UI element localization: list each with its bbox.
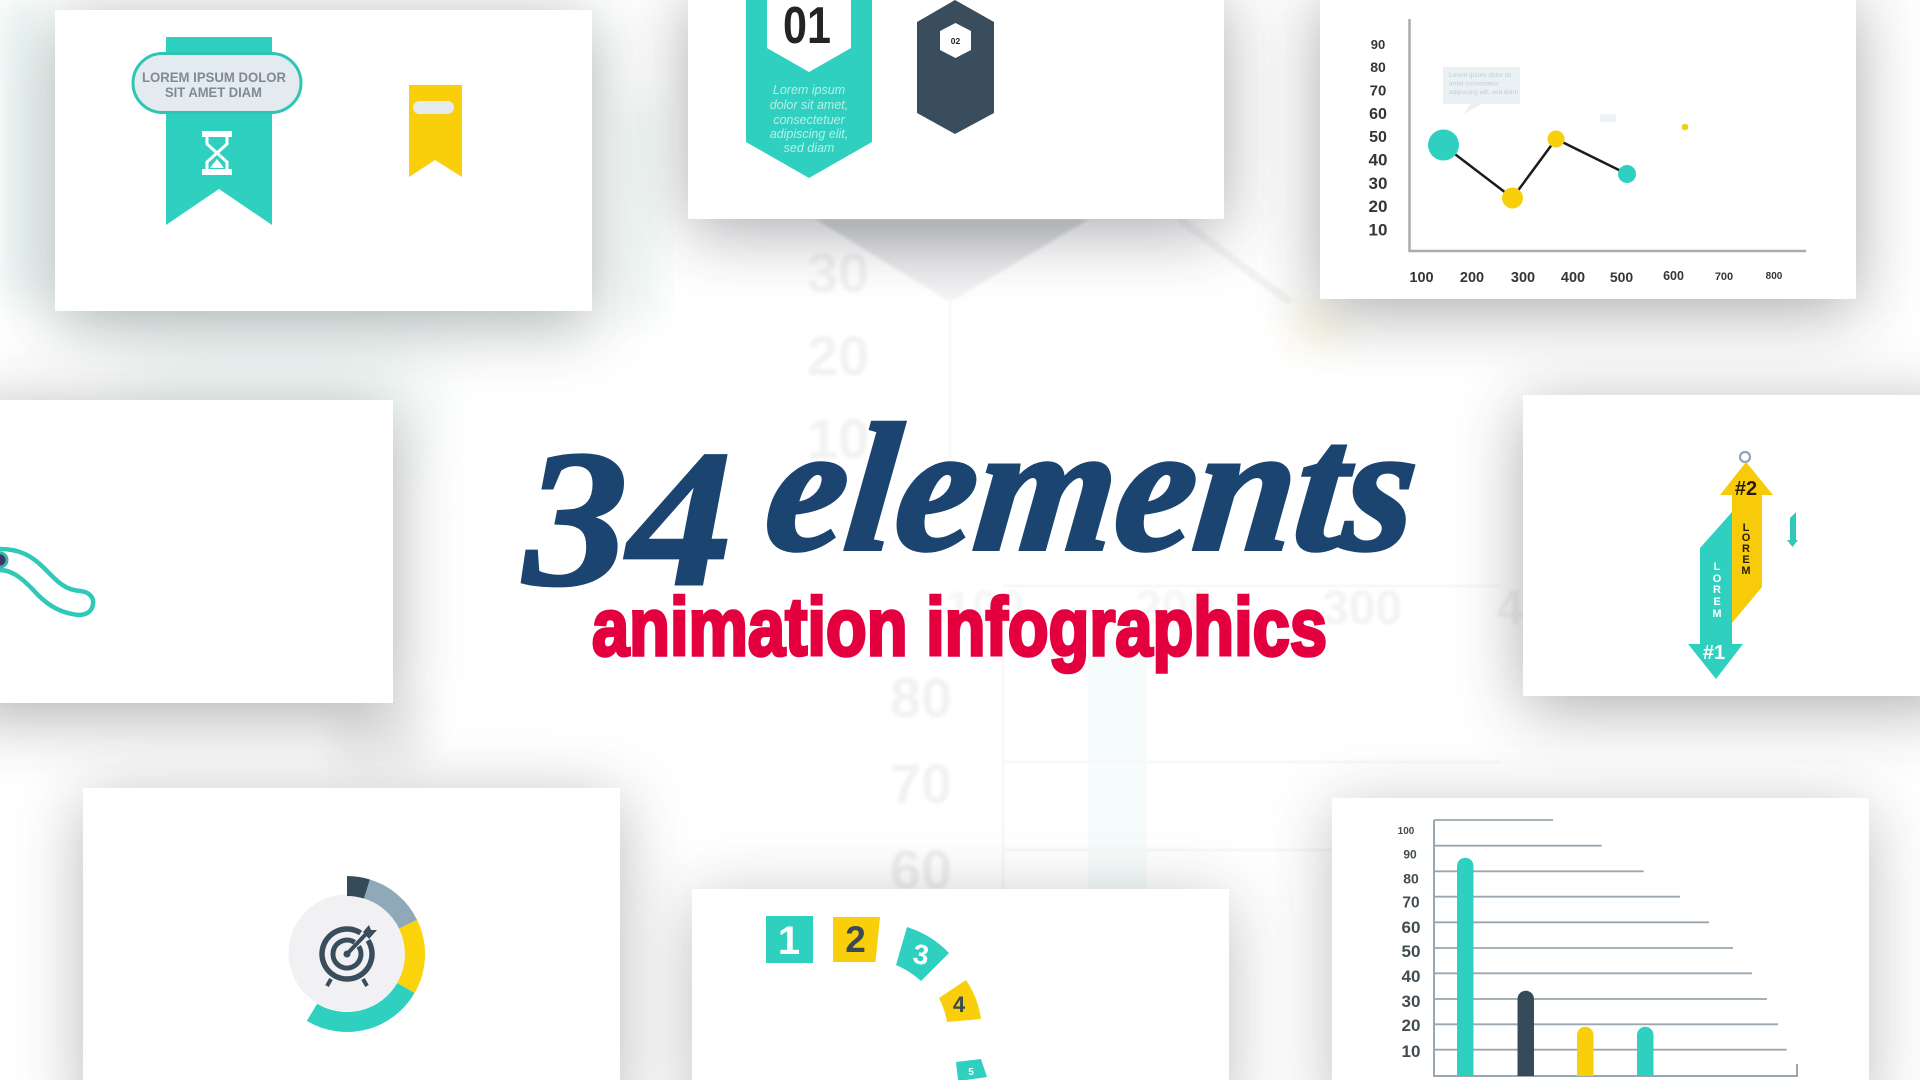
y axis labels: 60: [1369, 106, 1387, 123]
callout bubble: Lorem ipsum dolor sit: [1449, 72, 1511, 79]
dark hexagon 02: [917, 0, 994, 134]
label pill: LOREM IPSUM DOLOR: [142, 69, 286, 85]
y axis labels: 40: [1402, 967, 1420, 986]
line series with data points: [1428, 124, 1688, 208]
panel: bar chart: [1332, 798, 1869, 1080]
teal down arrow #1: O: [1713, 573, 1722, 585]
yellow up arrow #2: #2: [1735, 478, 1757, 500]
yellow up arrow #2: O: [1742, 532, 1751, 544]
y axis labels: 10: [1369, 220, 1387, 240]
background: faint enlarged chart behind panels: 30: [807, 241, 869, 304]
step 5: 5: [968, 1067, 974, 1078]
x axis labels: [1409, 269, 1783, 286]
banner body text: [770, 83, 848, 155]
step 1: [766, 916, 813, 963]
y axis labels: 50: [1369, 129, 1387, 146]
y axis labels: 90: [1403, 848, 1417, 862]
x axis labels: 700: [1715, 271, 1733, 283]
background: faint enlarged chart behind panels: 60: [890, 838, 952, 901]
yellow up arrow #2: L: [1743, 522, 1750, 534]
y axis labels: 40: [1369, 150, 1387, 170]
banner body text: Lorem ipsum: [773, 83, 845, 97]
y axis labels: 80: [1403, 870, 1419, 886]
y axis labels: 90: [1371, 37, 1385, 52]
label pill: [133, 54, 301, 112]
y axis labels: 50: [1402, 942, 1420, 961]
step 4: 4: [953, 992, 966, 1017]
banner body text: adipiscing elit,: [770, 127, 848, 141]
panel: curved numbered steps: [692, 889, 1229, 1080]
callout bubble: amet consectetur: [1449, 80, 1500, 88]
x axis labels: 500: [1610, 269, 1633, 285]
x axis labels: 600: [1663, 269, 1684, 283]
y axis labels: 100: [1398, 826, 1415, 837]
teal down arrow #1: M: [1712, 608, 1722, 620]
title: 34 elements: [522, 387, 1427, 627]
background: faint enlarged chart behind panels: 10: [807, 407, 869, 470]
label pill: SIT AMET DIAM: [165, 84, 262, 100]
step 5: [956, 1059, 987, 1080]
icon: gear ring: [1740, 452, 1750, 462]
background: faint enlarged chart behind panels: 300: [1322, 582, 1402, 635]
yellow up arrow #2: R: [1742, 543, 1750, 555]
teal down arrow #1: [1688, 512, 1743, 679]
y axis labels: 70: [1402, 894, 1420, 912]
background: faint enlarged chart behind panels: 200: [1135, 582, 1215, 635]
dark hexagon 02: 02: [951, 36, 960, 46]
panel: numbered hexagon banners: [688, 0, 1224, 219]
squiggle outline shape: [0, 549, 93, 615]
grid and axes: [1434, 820, 1797, 1076]
step 3: [896, 927, 949, 981]
banner body text: dolor sit amet,: [770, 98, 848, 112]
donut ring: [288, 886, 415, 1022]
x axis labels: 300: [1511, 270, 1535, 286]
background: faint enlarged chart behind panels: 4: [1497, 582, 1524, 635]
teal down arrow #1: #1: [1703, 642, 1725, 664]
y axis labels: [1398, 826, 1420, 1061]
teal banner 01: [746, 0, 872, 178]
banner body text: consectetuer: [773, 113, 846, 127]
banner body text: sed diam: [784, 141, 834, 155]
background: faint enlarged chart behind panels: 70: [890, 752, 952, 815]
background: faint enlarged chart behind panels: 80: [890, 666, 952, 729]
step 4: [939, 980, 981, 1022]
x axis labels: 800: [1766, 271, 1783, 282]
small teal arrow: [1787, 512, 1798, 547]
panel: twin arrows: [1523, 395, 1920, 696]
title: 34 elements: 34: [522, 411, 732, 627]
teal down arrow #1: R: [1713, 584, 1721, 596]
step 3: 3: [911, 938, 931, 971]
y axis labels: 10: [1402, 1042, 1420, 1061]
teal down arrow #1: E: [1713, 596, 1721, 608]
subtitle: animation infographics: animation infographics: [592, 582, 1327, 673]
y axis labels: 60: [1402, 918, 1420, 937]
step 2: [833, 917, 880, 962]
yellow up arrow #2: [1720, 462, 1773, 623]
x axis labels: 200: [1460, 270, 1484, 286]
title: 34 elements: elements: [758, 387, 1427, 589]
icon: hourglass: [202, 131, 232, 175]
icon: target with arrow: [322, 925, 377, 986]
yellow ribbon: [409, 85, 462, 177]
y axis labels: 20: [1369, 197, 1387, 216]
teal ribbon with label and hourglass: [133, 37, 301, 225]
panel: left squiggle: [0, 400, 393, 703]
x axis labels: 100: [1409, 270, 1434, 286]
background: faint enlarged chart behind panels: [0, 0, 1524, 901]
step 1: 1: [778, 919, 800, 963]
step 2: 2: [845, 919, 866, 960]
background: faint enlarged chart behind panels: 100: [945, 582, 1025, 635]
y axis labels: [1369, 37, 1387, 240]
yellow up arrow #2: E: [1742, 554, 1750, 566]
callout bubble: [1443, 67, 1520, 114]
x axis labels: 400: [1561, 270, 1585, 286]
chart axes: [1410, 19, 1806, 251]
panel: line chart: [1320, 0, 1856, 299]
bars: [1457, 858, 1654, 1076]
callout bubble: adipiscing elit, sed diam: [1449, 89, 1518, 96]
background: faint enlarged chart behind panels: 20: [807, 324, 869, 387]
y axis labels: 30: [1402, 992, 1420, 1011]
y axis labels: 70: [1370, 82, 1386, 100]
panel: target donut: [83, 788, 620, 1080]
yellow up arrow #2: M: [1741, 565, 1751, 577]
y axis labels: 30: [1369, 174, 1387, 193]
y axis labels: 80: [1370, 59, 1386, 75]
panel: ribbon badges: [55, 10, 592, 311]
teal down arrow #1: L: [1714, 561, 1721, 573]
y axis labels: 20: [1402, 1016, 1420, 1035]
